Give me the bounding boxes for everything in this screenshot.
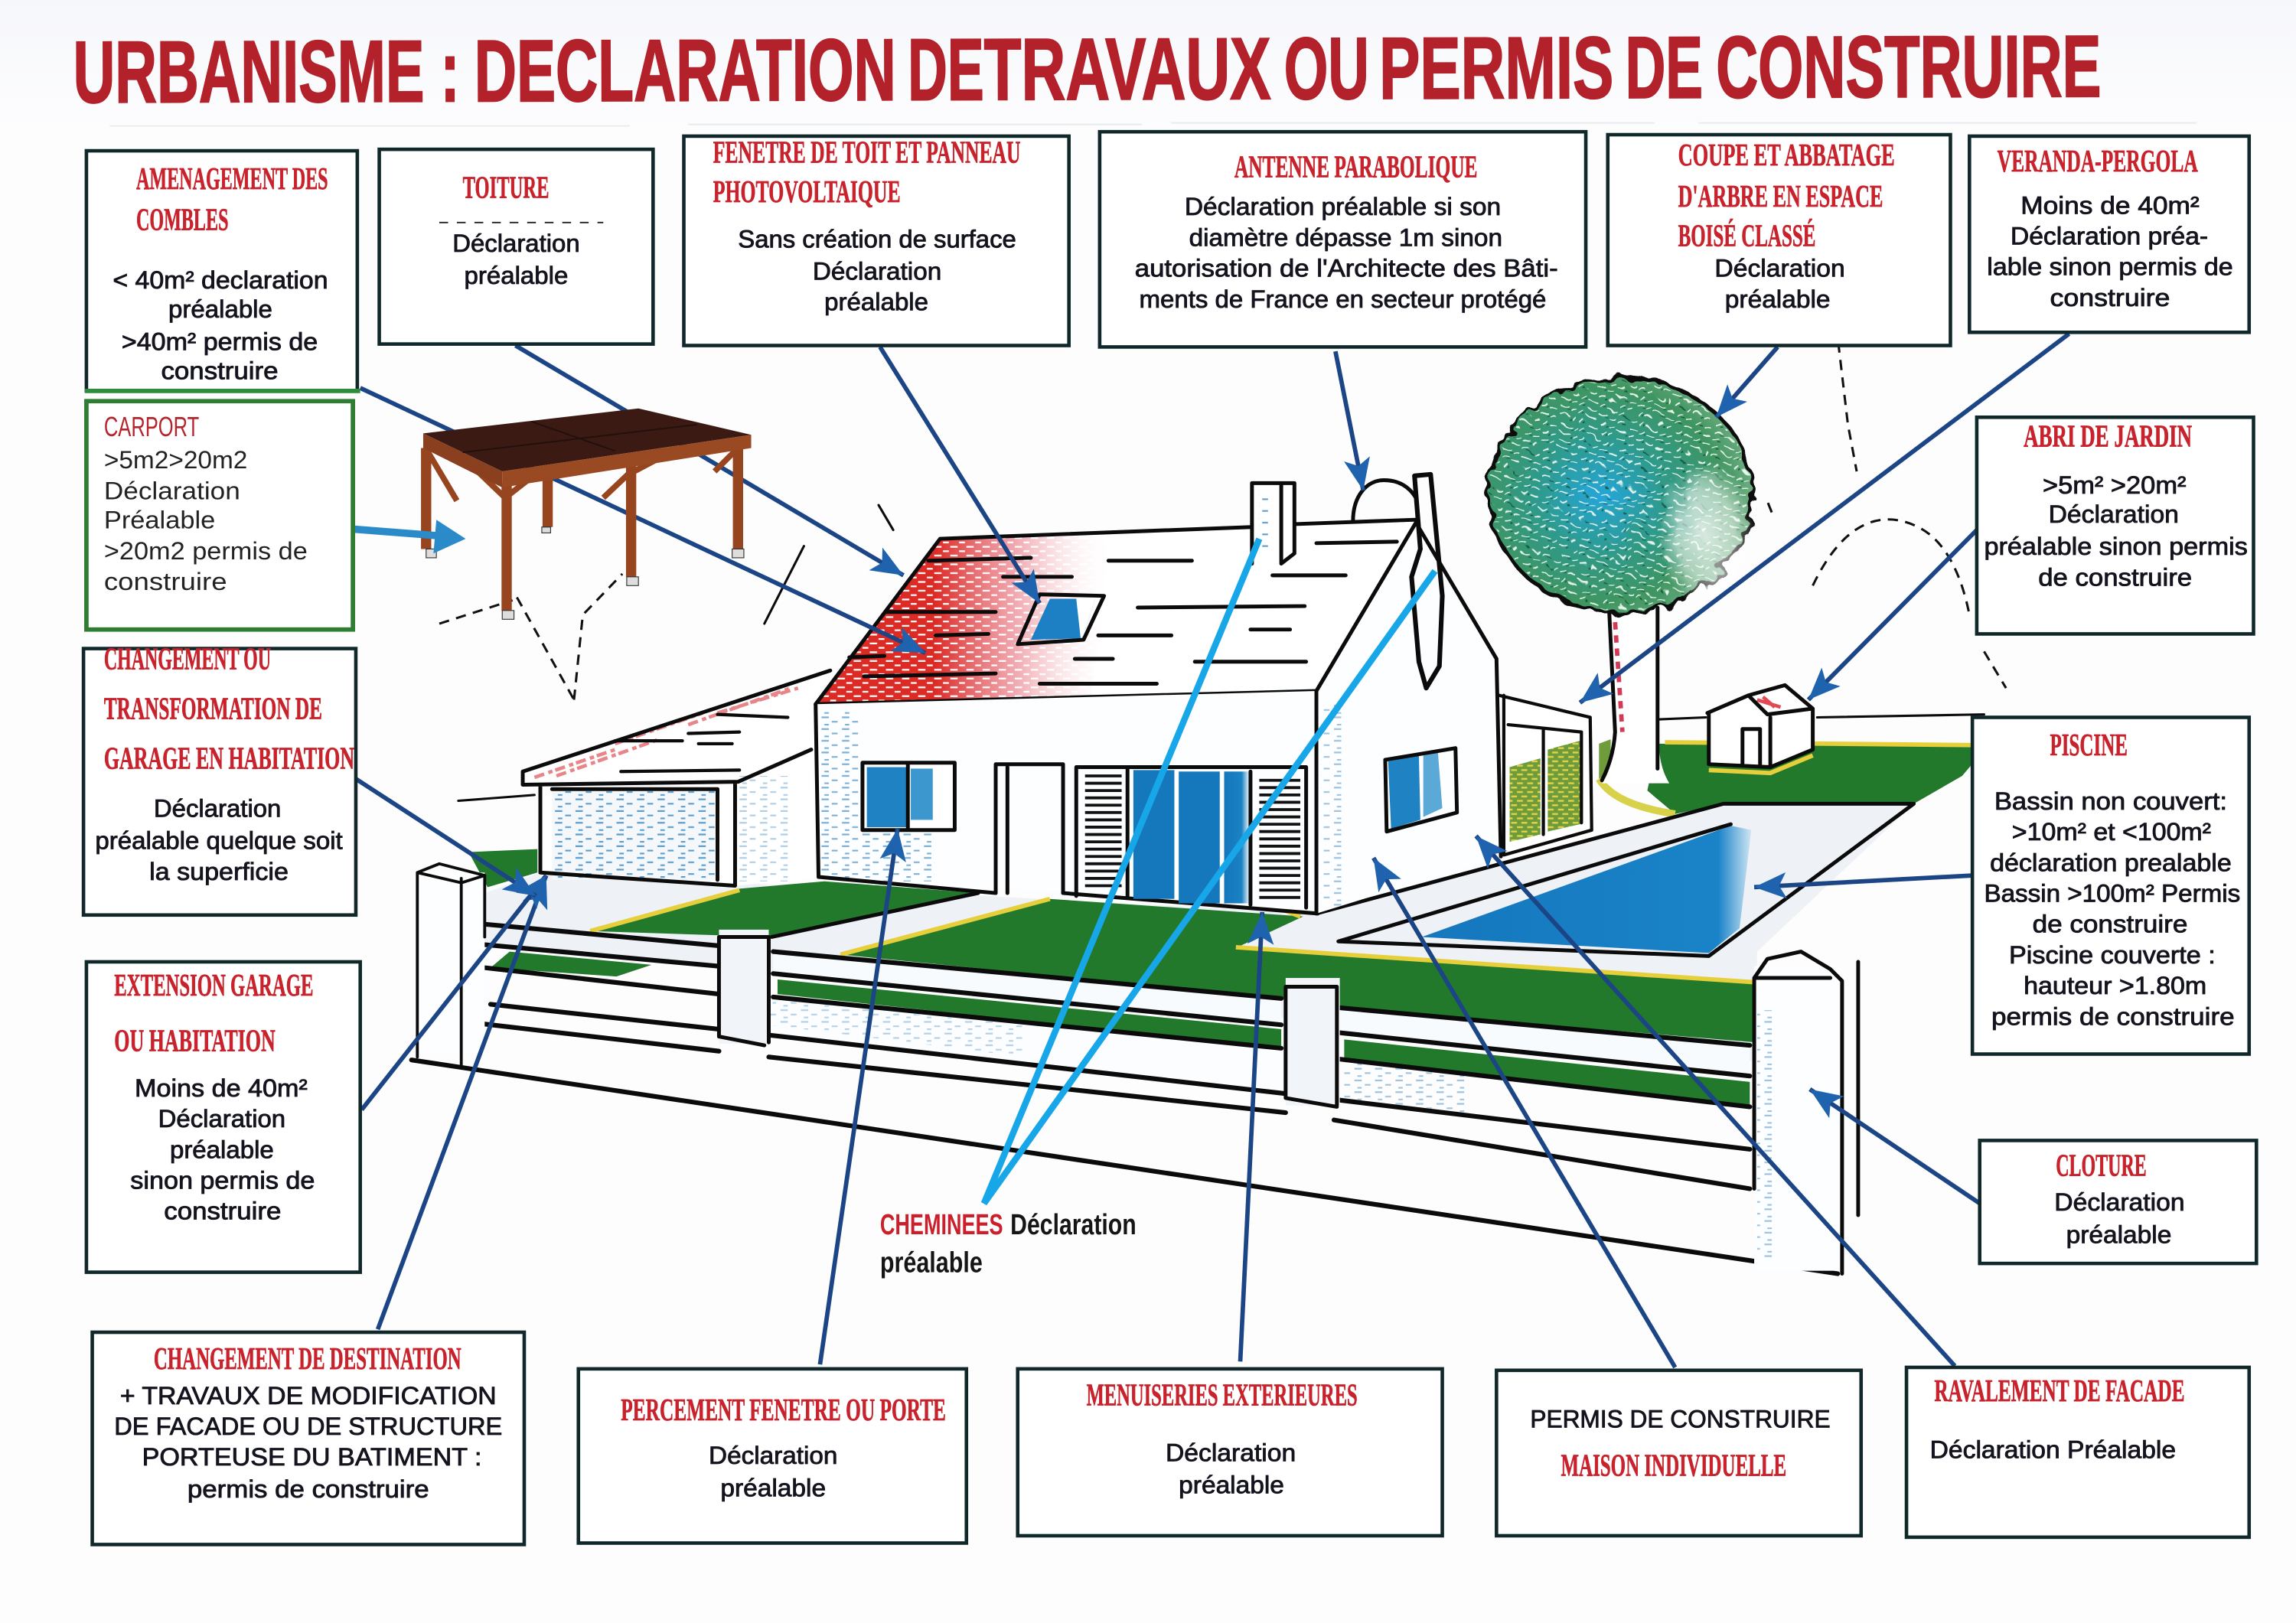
text: Piscine couverte : [2009, 941, 2216, 969]
text: >5m2>20m2 [104, 446, 247, 474]
fence [412, 864, 1858, 1274]
veranda [1499, 696, 1592, 855]
text: PERMIS DE CONSTRUIRE [1530, 1405, 1831, 1432]
side window [1385, 748, 1457, 832]
panel: piscine [1972, 717, 2249, 1054]
text [2054, 1188, 2185, 1248]
text: Déclaration [1714, 255, 1845, 282]
heading: MAISON INDIVIDUELLE [1561, 1448, 1786, 1483]
landscape sketch lines [439, 325, 2062, 801]
text: Déclaration [158, 1105, 285, 1133]
heading: CHANGEMENT DE DESTINATION [154, 1341, 461, 1376]
text: préalable [168, 295, 272, 323]
text: + TRAVAUX DE MODIFICATION [120, 1382, 497, 1410]
text: construire [104, 568, 227, 595]
text: Bassin non couvert: [1994, 787, 2227, 815]
illustration: house, garden and fence [412, 378, 1987, 1274]
text: déclaration prealable [1990, 849, 2232, 876]
heading: AMENAGEMENT DES [136, 161, 328, 196]
text: diamètre dépasse 1m sinon [1189, 223, 1502, 251]
title: PERMIS [1379, 19, 1613, 118]
text: sinon permis de [130, 1167, 315, 1194]
tree [1489, 378, 1753, 784]
text: >20m2 permis de [104, 537, 308, 565]
text [439, 223, 603, 289]
text: Déclaration [2054, 1188, 2185, 1216]
text: préalable [824, 288, 928, 316]
text: permis de construire [188, 1475, 429, 1503]
heading: TOITURE [463, 169, 549, 204]
text [130, 1074, 315, 1225]
text: préalable quelque soit [95, 827, 343, 855]
text: préalable [465, 262, 568, 289]
label: cheminées: CHEMINEES [880, 1208, 1003, 1241]
ground and terrace [481, 803, 1914, 1061]
heading [713, 134, 1021, 209]
text [104, 446, 308, 595]
text: construire [164, 1198, 281, 1225]
chimney [1252, 483, 1294, 564]
text: DE FACADE OU DE STRUCTURE [114, 1413, 502, 1440]
text [1714, 255, 1845, 313]
text: lable sinon permis de [1987, 253, 2233, 281]
text [113, 266, 328, 385]
panel: fenêtre de toit et panneau photovoltaïque [684, 134, 1069, 346]
panel: clôture [1980, 1140, 2256, 1263]
panel: percement fenêtre ou porte [579, 1369, 967, 1543]
bay window and shutters [1076, 768, 1306, 908]
text: la superficie [149, 858, 289, 885]
text: Bassin >100m² Permis [1984, 880, 2240, 908]
text: Déclaration [2049, 500, 2179, 528]
garden shed [1707, 685, 1813, 773]
back lawn [1599, 739, 1987, 814]
panel: antenne parabolique [1100, 132, 1586, 347]
panel: ravalement de façade [1906, 1367, 2249, 1537]
text [1166, 1439, 1296, 1498]
heading: EXTENSION GARAGE [114, 967, 313, 1002]
text: Préalable [104, 507, 215, 534]
heading [1678, 137, 1895, 253]
front wall [816, 691, 1318, 914]
front door [996, 764, 1063, 893]
heading: MENUISERIES EXTERIEURES [1087, 1377, 1358, 1413]
heading: ANTENNE PARABOLIQUE [1234, 149, 1477, 184]
heading: CHANGEMENT OU [104, 640, 271, 676]
text: de construire [2033, 911, 2187, 938]
title: DECLARATION [475, 21, 896, 120]
heading: BOISÉ CLASSÉ [1678, 217, 1815, 253]
text: Déclaration [154, 795, 281, 823]
roof window [1018, 595, 1104, 644]
text [1987, 191, 2233, 311]
text [1135, 193, 1558, 313]
text: préalable [2066, 1221, 2171, 1248]
text: >5m² >20m² [2043, 471, 2187, 499]
heading: COUPE ET ABBATAGE [1678, 137, 1895, 172]
garage [523, 670, 830, 886]
heading: TRANSFORMATION DE [104, 690, 322, 725]
text: Déclaration préa- [2011, 223, 2208, 250]
title: URBANISME : [73, 22, 460, 122]
text: Déclaration Préalable [1930, 1436, 2176, 1464]
text: construire [161, 357, 279, 385]
heading: PHOTOVOLTAIQUE [713, 174, 901, 209]
arrows from captions to the house [356, 334, 2069, 1367]
text: de construire [2038, 563, 2192, 591]
black chimney flue [1411, 474, 1443, 688]
text: >40m² permis de [122, 328, 318, 355]
heading: CLOTURE [2056, 1147, 2147, 1182]
panel: changement ou transformation de garage [83, 640, 356, 915]
panel: toiture [380, 149, 653, 344]
label: cheminées [880, 1208, 1137, 1279]
text: Déclaration [1166, 1439, 1296, 1466]
heading [114, 967, 313, 1058]
heading: PERCEMENT FENETRE OU PORTE [621, 1392, 946, 1427]
heading: OU HABITATION [114, 1023, 276, 1058]
text: construire [2050, 284, 2170, 311]
text: Sans création de surface [738, 225, 1016, 253]
text: PORTEUSE DU BATIMENT : [142, 1443, 481, 1471]
heading: D'ARBRE EN ESPACE [1678, 178, 1883, 213]
panel: permis de construire maison individuelle [1496, 1370, 1861, 1536]
text [1984, 787, 2240, 1030]
text: >10m² et <100m² [2012, 818, 2211, 846]
text: préalable [1725, 285, 1831, 313]
panel: abri de jardin [1977, 417, 2253, 634]
heading [136, 161, 328, 236]
heading: FENETRE DE TOIT ET PANNEAU [713, 134, 1021, 169]
title: DE [1625, 19, 1703, 117]
front lawns [468, 849, 1756, 1042]
text [709, 1442, 837, 1501]
text: Déclaration [813, 257, 941, 285]
pool and terrace [1316, 803, 1914, 956]
title: DE [908, 21, 984, 119]
heading: ABRI DE JARDIN [2024, 419, 2192, 454]
text: préalable [1179, 1471, 1284, 1498]
carport arrow [290, 520, 465, 553]
satellite dish [1353, 481, 1416, 521]
text [1984, 471, 2248, 591]
panel: véranda-pergola [1969, 136, 2249, 332]
text: Déclaration [104, 477, 240, 504]
main roof [816, 520, 1416, 704]
title: OU [1284, 20, 1369, 118]
text: hauteur >1.80m [2024, 972, 2206, 999]
text [738, 225, 1016, 316]
front window [863, 763, 954, 830]
text: Déclaration [709, 1442, 837, 1469]
fence posts [417, 864, 1858, 1274]
text: préalable [170, 1136, 274, 1163]
cheminées arrows [984, 539, 1435, 1204]
text: autorisation de l'Architecte des Bâti- [1135, 255, 1558, 282]
text: préalable sinon permis [1984, 533, 2248, 560]
text: ments de France en secteur protégé [1140, 285, 1546, 313]
text [114, 1382, 502, 1503]
label: cheminées: Déclaration [1010, 1208, 1137, 1241]
title [73, 18, 2102, 122]
gable wall [1316, 523, 1501, 914]
panel: changement de destination [93, 1332, 524, 1544]
text [95, 795, 343, 885]
text: < 40m² declaration [113, 266, 328, 294]
panel: carport [86, 401, 353, 630]
carport illustration [423, 409, 752, 619]
heading: COMBLES [136, 201, 228, 236]
panel: extension garage ou habitation [86, 962, 360, 1273]
heading [104, 640, 354, 775]
label: cheminées: préalable [880, 1247, 983, 1279]
title: TRAVAUX [983, 20, 1271, 119]
heading: GARAGE EN HABITATION [104, 740, 354, 775]
panel: menuiseries extérieures [1018, 1369, 1443, 1536]
text: Moins de 40m² [2020, 191, 2200, 219]
text: Moins de 40m² [135, 1074, 308, 1102]
text: Déclaration [452, 230, 580, 257]
heading: CARPORT [104, 411, 199, 442]
text: Déclaration préalable si son [1185, 193, 1501, 220]
panel: coupe et abbatage d'arbre [1608, 135, 1950, 346]
text: préalable [720, 1474, 826, 1501]
title: CONSTRUIRE [1716, 18, 2102, 117]
panel: aménagement des combles [85, 151, 360, 391]
text: permis de construire [1991, 1002, 2235, 1030]
heading: PISCINE [2050, 727, 2128, 762]
